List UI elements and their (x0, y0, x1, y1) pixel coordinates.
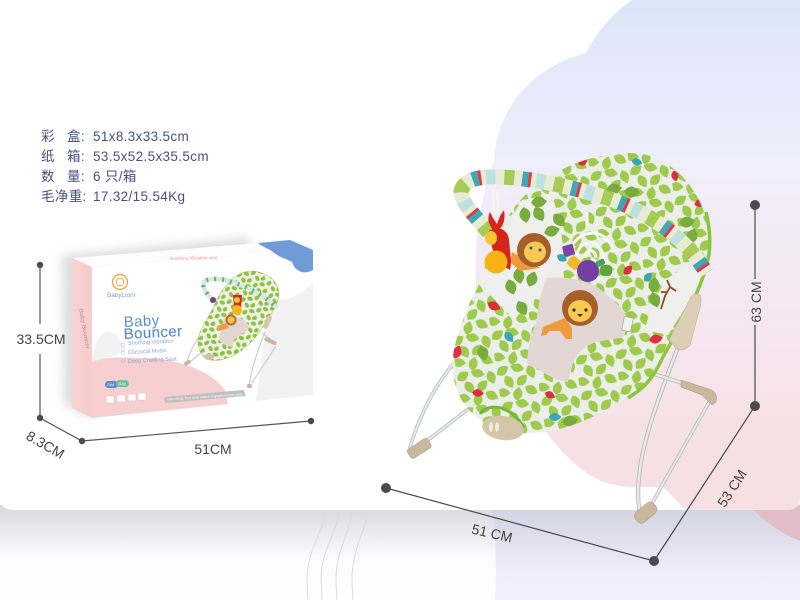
teal bead (595, 258, 606, 267)
label 33.5CM: 33.5CM (16, 331, 66, 347)
spine label: Baby Bouncer (77, 308, 90, 350)
spec: quantity: 量: (67, 169, 85, 184)
headrest lion body (510, 252, 540, 271)
logo (107, 274, 135, 299)
spec text block (41, 128, 209, 204)
belly ball (484, 250, 508, 274)
spec: quantity: 数 (41, 169, 55, 184)
background: dark pink corner (748, 505, 800, 541)
hanging ring mobile (562, 212, 614, 282)
headrest white panel (480, 195, 563, 320)
background: wavy lines (307, 510, 368, 600)
box badges: 24M (107, 383, 114, 387)
height line (40, 265, 311, 441)
lion nose (577, 314, 583, 317)
monkey print (661, 280, 676, 309)
green bead (600, 265, 612, 276)
mini arch (203, 279, 277, 308)
hanging monkey toy (484, 190, 511, 274)
box heading (123, 312, 183, 343)
lion mane (562, 290, 598, 326)
box spine (72, 258, 92, 418)
body (488, 228, 511, 270)
bouncer dimension lines (381, 200, 764, 566)
box top face (72, 240, 313, 267)
spec: colour box: 盒: (67, 128, 85, 144)
headrest lion eyes (530, 246, 532, 250)
box features: Soothing Vibration (128, 339, 174, 347)
play arch (461, 177, 707, 273)
red accent leaves (450, 156, 707, 401)
box badges (105, 380, 129, 388)
spec: weight: 17.32/15.54Kg (93, 189, 185, 204)
background: bottom band (0, 505, 800, 600)
trim (480, 407, 524, 428)
box front decor (92, 282, 313, 401)
lion body (541, 318, 572, 339)
label 63 CM: 63 CM (748, 281, 764, 323)
spec: weight: 毛净重: (41, 189, 87, 204)
purple cube (562, 244, 575, 257)
rings (570, 212, 614, 258)
face (485, 231, 497, 245)
left wires (410, 362, 455, 447)
box heading: Bouncer (123, 323, 183, 343)
harness buckle (622, 316, 633, 332)
spec: quantity: 6 只/箱 (93, 169, 137, 184)
right white panel (646, 266, 700, 335)
box icons (106, 393, 146, 403)
teal accent leaves (502, 157, 654, 421)
headrest lion mane (517, 233, 551, 267)
mini lion (217, 314, 236, 331)
box pink wave (92, 357, 228, 418)
green piping (628, 212, 710, 398)
box features (121, 339, 177, 365)
big dark leaves (475, 182, 700, 428)
box features: Deep Cradling Seat (128, 356, 177, 365)
vibration unit (480, 407, 525, 443)
dimension dots (37, 262, 314, 444)
mini mobile (210, 297, 216, 303)
product box (62, 238, 313, 418)
harness lion (541, 290, 598, 339)
spec: carton: 箱: (67, 149, 85, 164)
bouncer feet (406, 380, 716, 525)
label 51CM: 51CM (194, 441, 232, 457)
label 53 CM: 53 CM (714, 467, 750, 510)
box caption pill: Take-Along Toys keep babies engaged as they grow (167, 392, 244, 401)
label 8.3CM: 8.3CM (24, 427, 67, 462)
dots (381, 200, 760, 566)
hook (493, 190, 498, 212)
mini monkey toy (232, 295, 242, 315)
box heading: Baby (123, 312, 160, 331)
spec: carton: 纸 (41, 149, 55, 164)
spec: colour box: 彩 (41, 129, 55, 144)
body (481, 413, 525, 443)
purple ball (577, 260, 599, 282)
spec: carton: 53.5x52.5x35.5cm (93, 149, 209, 164)
box shadow (62, 238, 250, 418)
label 51 CM: 51 CM (470, 521, 514, 546)
arms (488, 210, 505, 232)
lion face (568, 300, 592, 322)
logo: BabyLioni (107, 292, 135, 299)
mini wires (186, 331, 276, 386)
headrest lion face (524, 242, 546, 262)
box badges: 11kg (118, 382, 126, 386)
harness pad (527, 277, 627, 382)
background: cloud blob (476, 0, 800, 510)
yellow cube (566, 255, 582, 270)
box blue cloud (258, 240, 313, 272)
lion eyes (572, 308, 576, 312)
mini feet (183, 337, 277, 388)
box front face (92, 250, 313, 418)
box top small text: Soothing Vibration seat (170, 255, 218, 261)
bouncer cream pad (669, 294, 701, 350)
box dimension lines (16, 262, 314, 462)
buttons (489, 422, 493, 432)
mini seat (198, 271, 279, 360)
bouncer frame back (410, 350, 712, 515)
right wires (638, 350, 677, 515)
box mini bouncer (183, 271, 279, 388)
headrest lion (510, 233, 551, 271)
lines (386, 205, 755, 561)
spec: colour box: 51x8.3x33.5cm (93, 129, 189, 144)
mini cream pad (262, 315, 273, 330)
background: lavender lower band (491, 505, 800, 600)
box features: Classical Music (128, 348, 167, 356)
box caption pill (164, 390, 245, 403)
mini vibrator (204, 354, 214, 360)
mini harness (219, 316, 249, 347)
bouncer seat (450, 153, 710, 433)
